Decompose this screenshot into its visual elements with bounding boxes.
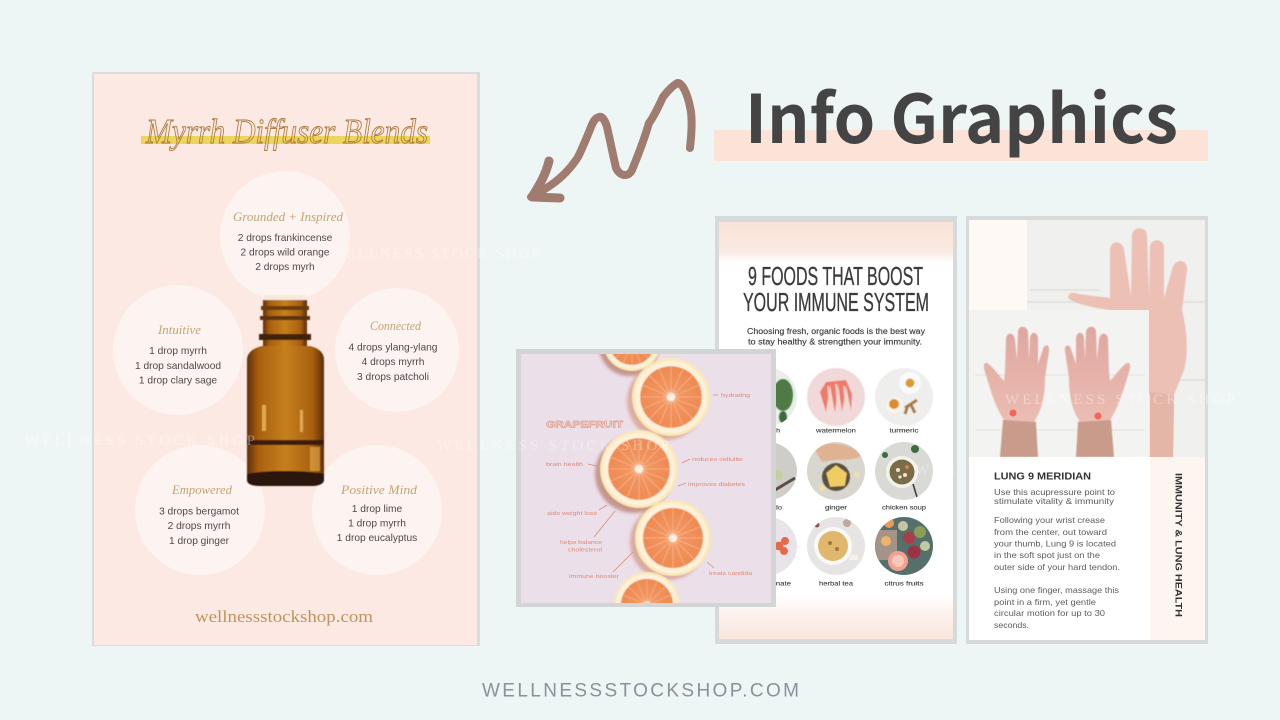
title highlight and script title: Myrrh Diffuser Blends	[145, 112, 428, 151]
icon: red pressure point right	[1094, 412, 1102, 420]
food: watermelon	[807, 368, 865, 426]
body text: circular motion for up to 30	[994, 609, 1106, 618]
benefit labels: cholesterol	[568, 548, 602, 554]
food labels: pomegranate	[745, 580, 792, 588]
benefit labels: hydrating	[721, 393, 750, 399]
panel: 9 foods infographic	[712, 216, 960, 644]
watermarks: WELLNESS STOCK SHOP	[1005, 392, 1235, 408]
circle: Empowered: Empowered	[171, 482, 232, 497]
benefit labels	[546, 393, 753, 580]
circle: Empowered: 1 drop ginger	[169, 536, 230, 547]
food labels: citrus fruits	[884, 580, 924, 588]
body text: seconds.	[994, 621, 1029, 630]
watermarks: WELLNESS STOCK SHOP	[330, 246, 540, 262]
icon: left hand	[984, 327, 1049, 457]
watercolor top band	[719, 222, 953, 259]
arrow: squiggle pointing to poster	[531, 83, 692, 198]
body text: Following your wrist crease	[994, 516, 1105, 525]
heading: 9 foods: 9 FOODS THAT BOOST	[748, 261, 923, 291]
side strip with vertical title: IMMUNITY & LUNG HEALTH	[1172, 473, 1184, 617]
circle: Positive Mind: 1 drop eucalyptus	[337, 533, 417, 544]
circle: Grounded + Inspired: 2 drops myrh	[255, 262, 315, 273]
food: turmeric	[875, 368, 933, 426]
circle: Intuitive: 1 drop myrrh	[149, 346, 207, 357]
watermarks	[25, 246, 1235, 478]
photo: two palms with acupressure points	[969, 310, 1149, 457]
circle: Grounded + Inspired: 2 drops wild orange	[241, 248, 330, 258]
footer url: wellnessstockshop.com	[195, 607, 373, 626]
watermarks: WELLNESS STOCK SHOP	[437, 438, 669, 454]
benefit labels: immune booster	[569, 574, 619, 580]
lead text	[994, 488, 1115, 506]
icon: red pressure point left	[1010, 410, 1016, 416]
circle: Intuitive: Intuitive	[157, 322, 201, 337]
panel: Lung 9 meridian infographic	[966, 216, 1208, 644]
food labels: chicken soup	[882, 504, 927, 512]
body text: point in a firm, yet gentle	[994, 598, 1097, 607]
lead text: Use this acupressure point to	[994, 488, 1115, 497]
panel: Myrrh diffuser blends poster	[92, 72, 480, 646]
heading: Info Graphics: Info Graphics	[745, 66, 1178, 163]
footer: site url: WELLNESSSTOCKSHOP.COM	[482, 680, 799, 702]
icon: right hand	[1065, 327, 1130, 457]
circle: Connected	[335, 288, 459, 412]
benefit labels: treats candida	[709, 571, 753, 577]
benefit labels: reduces cellulite	[692, 457, 743, 463]
circle: Connected: 3 drops patcholi	[357, 372, 429, 383]
benefit labels: improves diabetes	[688, 482, 745, 488]
heading: 9 foods	[743, 261, 929, 317]
food labels: spinach	[756, 428, 780, 434]
food grid	[776, 368, 933, 586]
intro text: Choosing fresh, organic foods is the best way	[747, 327, 925, 336]
circle: Connected: Connected	[370, 318, 421, 333]
body text: in the soft spot just on the	[994, 551, 1100, 560]
food labels: ginger	[825, 504, 848, 512]
food labels: watermelon	[815, 428, 857, 434]
intro text	[747, 327, 925, 346]
circle: Intuitive	[113, 285, 243, 415]
title: Grapefruit: GRAPEFRUIT	[546, 420, 623, 430]
heading: Lung 9 Meridian: LUNG 9 MERIDIAN	[994, 472, 1091, 482]
circle: Empowered	[135, 445, 265, 575]
body text	[994, 516, 1120, 630]
circle: Connected: 4 drops myrrh	[362, 357, 424, 368]
benefit labels: helps balance	[560, 540, 602, 546]
circle: Grounded + Inspired: 2 drops frankincense	[238, 233, 333, 244]
food: citrus fruits	[875, 517, 933, 575]
intro text: to stay healthy & strengthen your immunity.	[748, 338, 922, 346]
food labels: turmeric	[890, 428, 919, 434]
food: avocado	[776, 443, 797, 499]
food labels: avocado	[754, 504, 783, 512]
circle: Grounded + Inspired	[220, 171, 350, 301]
food: spinach	[776, 369, 797, 425]
circle: Empowered: 2 drops myrrh	[168, 521, 230, 532]
food: chicken soup	[875, 442, 933, 500]
heading: 9 foods: YOUR IMMUNE SYSTEM	[743, 287, 929, 317]
circle: Intuitive: 1 drop sandalwood	[135, 361, 221, 372]
circle: Positive Mind: 1 drop lime	[352, 504, 403, 515]
side strip with vertical title	[1150, 457, 1205, 640]
benefit labels: aids weight loss	[547, 511, 597, 517]
food: herbal tea	[807, 517, 865, 575]
cream corner block	[969, 220, 1027, 310]
watermarks: WE	[915, 462, 955, 478]
circle: Positive Mind: Positive Mind	[340, 482, 418, 497]
food labels	[745, 428, 927, 588]
benefit labels: brain health	[546, 462, 583, 468]
icon: amber essential oil bottle	[247, 295, 324, 486]
body text: Using one finger, massage this	[994, 586, 1119, 595]
food labels: herbal tea	[819, 580, 854, 588]
watermarks: WELLNESS STOCK SHOP	[25, 433, 255, 449]
lead text: stimulate vitality & immunity	[994, 497, 1115, 506]
photo: large hand on white wood	[1027, 220, 1205, 457]
food: pomegranate	[776, 518, 797, 574]
grapefruit slices	[593, 354, 712, 603]
body text: your thumb, Lung 9 is located	[994, 540, 1116, 548]
circle: Intuitive: 1 drop clary sage	[139, 376, 217, 386]
watercolor bottom band	[719, 602, 953, 639]
food: ginger	[807, 442, 865, 500]
circle: Positive Mind	[312, 445, 442, 575]
body text: from the center, out toward	[994, 528, 1108, 537]
panel: grapefruit infographic	[516, 349, 776, 607]
circle: Grounded + Inspired: Grounded + Inspired	[233, 209, 343, 224]
circle: Connected: 4 drops ylang-ylang	[349, 342, 438, 354]
circle: Empowered: 3 drops bergamot	[159, 506, 239, 518]
body text: outer side of your hard tendon.	[994, 563, 1120, 572]
circle: Positive Mind: 1 drop myrrh	[348, 518, 406, 530]
